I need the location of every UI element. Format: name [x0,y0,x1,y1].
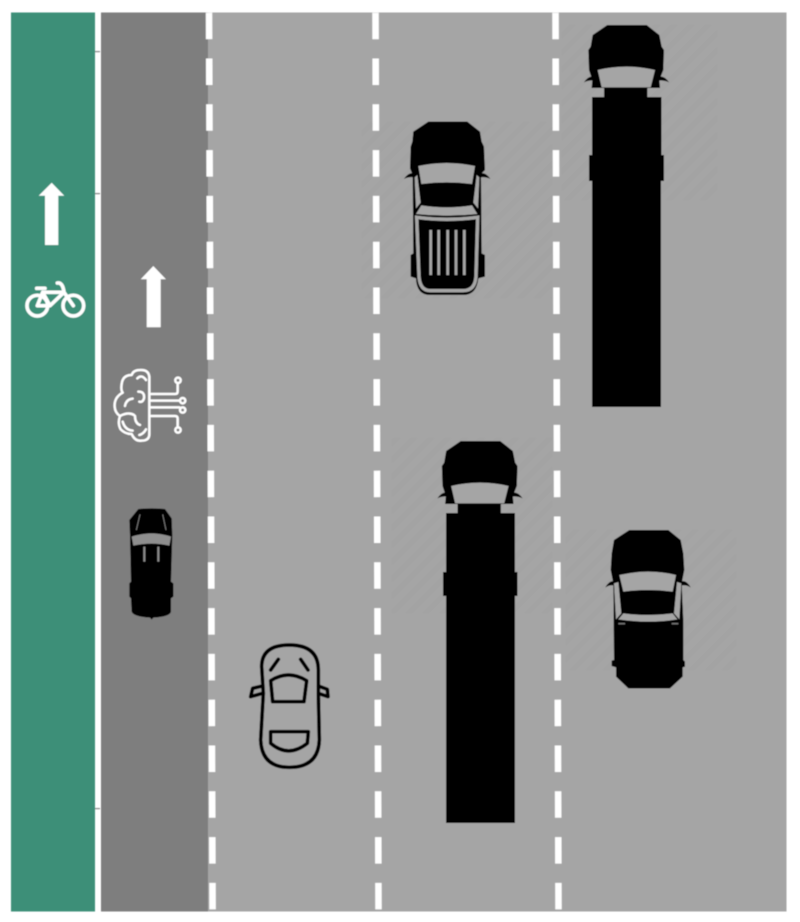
vehicle: outlined sports car [251,645,328,767]
icon: autonomous lane arrow [141,266,166,327]
vehicle: sedan [605,530,691,688]
lane divider 2 [376,13,378,911]
lane divider 3 [556,13,558,911]
vehicle: autonomous car [129,508,173,620]
truck trailer [589,97,664,407]
vehicle: semi truck middle lane [437,441,522,823]
gap marks [95,51,100,809]
vehicle: pickup truck [404,122,490,295]
vehicle shadow texture [362,25,736,670]
panel: bicycle lane [11,12,95,912]
truck cab [437,441,522,513]
icon: bicycle lane arrow [39,183,64,245]
panel: autonomous vehicle lane [101,12,208,912]
icon: brain with circuits [115,370,185,441]
truck cab [584,25,669,97]
icon: bicycle [27,283,84,316]
vehicle: semi truck right lane [584,25,669,407]
panel: general traffic lanes [208,12,786,912]
lane divider 1 [209,13,213,911]
truck trailer [443,513,518,823]
